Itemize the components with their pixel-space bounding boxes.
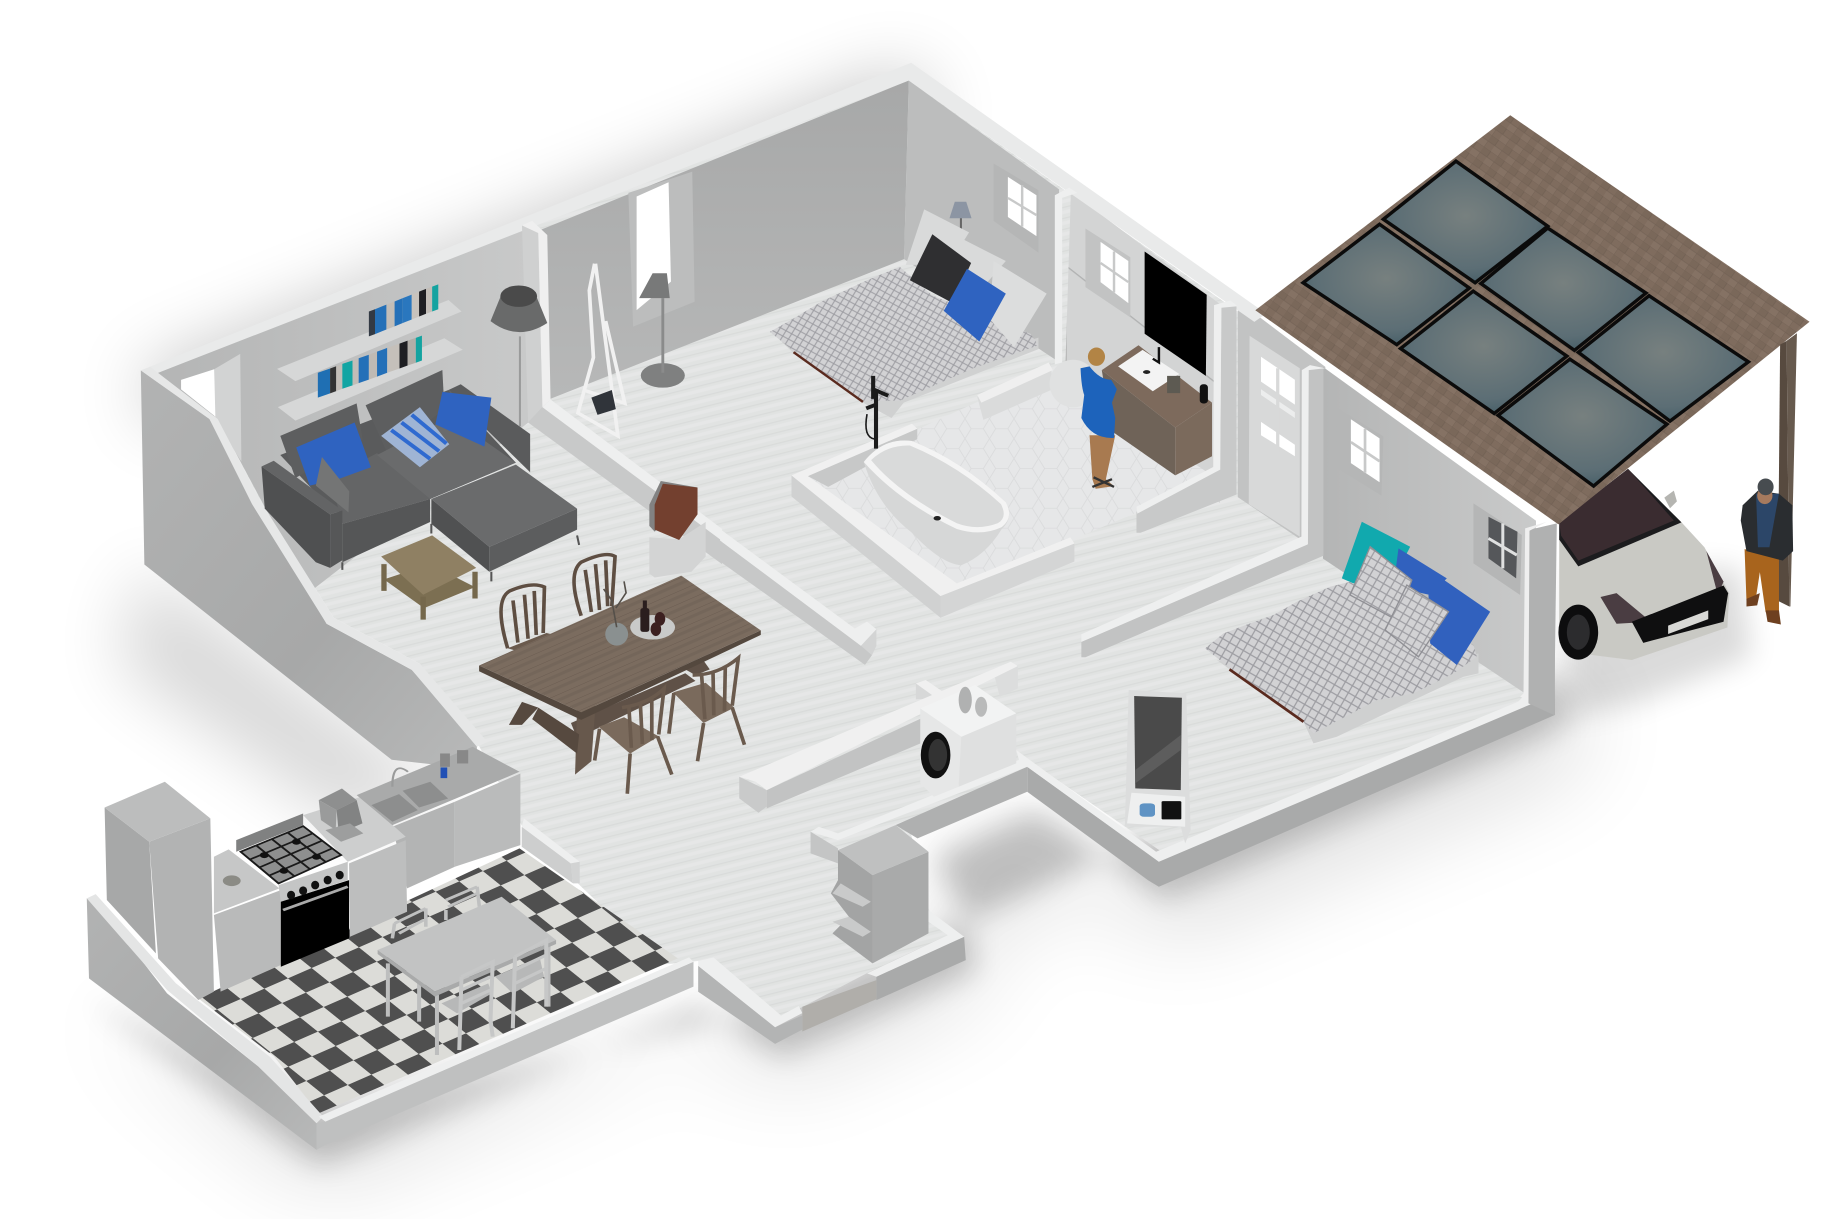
kitchen low wall	[522, 818, 580, 883]
coffee machine	[319, 788, 363, 842]
hallway door	[1249, 336, 1300, 537]
kitchen checker floor	[198, 848, 678, 1113]
bedroom window	[994, 163, 1038, 253]
corner wall end	[1520, 522, 1557, 715]
back wall: main bedroom	[538, 80, 909, 399]
roof, car and person group	[1255, 115, 1810, 660]
second bedroom group	[1205, 503, 1557, 743]
exterior living room wall	[141, 367, 488, 769]
bathroom window	[1085, 229, 1130, 317]
bedside lamp	[949, 202, 972, 229]
shelves with books	[277, 284, 463, 421]
bathroom hex floor	[808, 368, 1212, 583]
bottom wall of second bedroom and entry group	[739, 550, 1555, 1031]
left counter	[214, 849, 281, 992]
toilet	[1050, 360, 1097, 407]
man in winter jacket	[1741, 478, 1793, 624]
storage shelves	[811, 825, 928, 963]
main floor	[155, 80, 1536, 1015]
washing machine	[920, 685, 1016, 797]
black wall mirror	[1145, 251, 1207, 376]
table setting	[604, 581, 675, 646]
back wall: living room	[155, 227, 547, 592]
stove and oven	[236, 813, 349, 967]
cabinets and counter	[303, 747, 520, 937]
top wall cap	[141, 63, 1266, 381]
exterior wall face	[811, 550, 1555, 887]
car	[1558, 469, 1729, 660]
window opening in living room	[181, 354, 241, 462]
kitchen left wall	[87, 894, 323, 1150]
bathroom low wall	[977, 362, 1053, 420]
low wall with washing machine	[739, 662, 1018, 813]
hallway low wall	[1081, 365, 1325, 657]
woman in blue dress	[1081, 348, 1117, 489]
hall window	[1336, 408, 1383, 496]
kitchen front wall	[317, 957, 693, 1150]
bedroom partition	[1055, 188, 1077, 364]
bath faucet	[866, 376, 888, 449]
roof	[1255, 115, 1810, 524]
bathroom and bedroom group	[720, 163, 1325, 665]
solar panels	[1303, 161, 1748, 486]
side wall: main bedroom	[904, 80, 1059, 362]
low dividing wall end	[720, 529, 876, 665]
main bed	[770, 209, 1047, 418]
window in main bedroom back wall	[628, 172, 695, 327]
partition wall	[522, 221, 722, 564]
kitchen table and chairs	[378, 887, 556, 1055]
coffee table	[381, 535, 476, 620]
side wall: second bedroom	[1323, 367, 1536, 701]
bath end partition	[1136, 300, 1238, 533]
dining chairs behind table	[501, 555, 615, 656]
dining chairs in front of table	[595, 658, 744, 794]
side cabinet with brown case	[649, 481, 706, 578]
side wall: bathroom tiles	[1065, 192, 1220, 503]
leaning mirror	[578, 264, 625, 436]
bathtub	[864, 440, 1009, 565]
vanity unit	[1102, 345, 1212, 475]
sofa	[262, 370, 579, 581]
bed	[1205, 522, 1490, 743]
floor lamp	[491, 285, 547, 426]
fridge	[105, 782, 214, 1000]
standing lamp	[639, 273, 685, 388]
bedroom window	[1473, 503, 1522, 595]
tub enclosure	[792, 424, 1074, 618]
living room group	[262, 221, 761, 794]
dining table	[479, 576, 761, 775]
entry wall	[802, 910, 966, 1031]
entry left wall	[698, 957, 802, 1044]
roof post	[1778, 333, 1797, 607]
side wall: hallway	[1238, 301, 1325, 556]
standing mirror and tray	[1125, 690, 1191, 843]
kitchen group	[87, 747, 693, 1150]
